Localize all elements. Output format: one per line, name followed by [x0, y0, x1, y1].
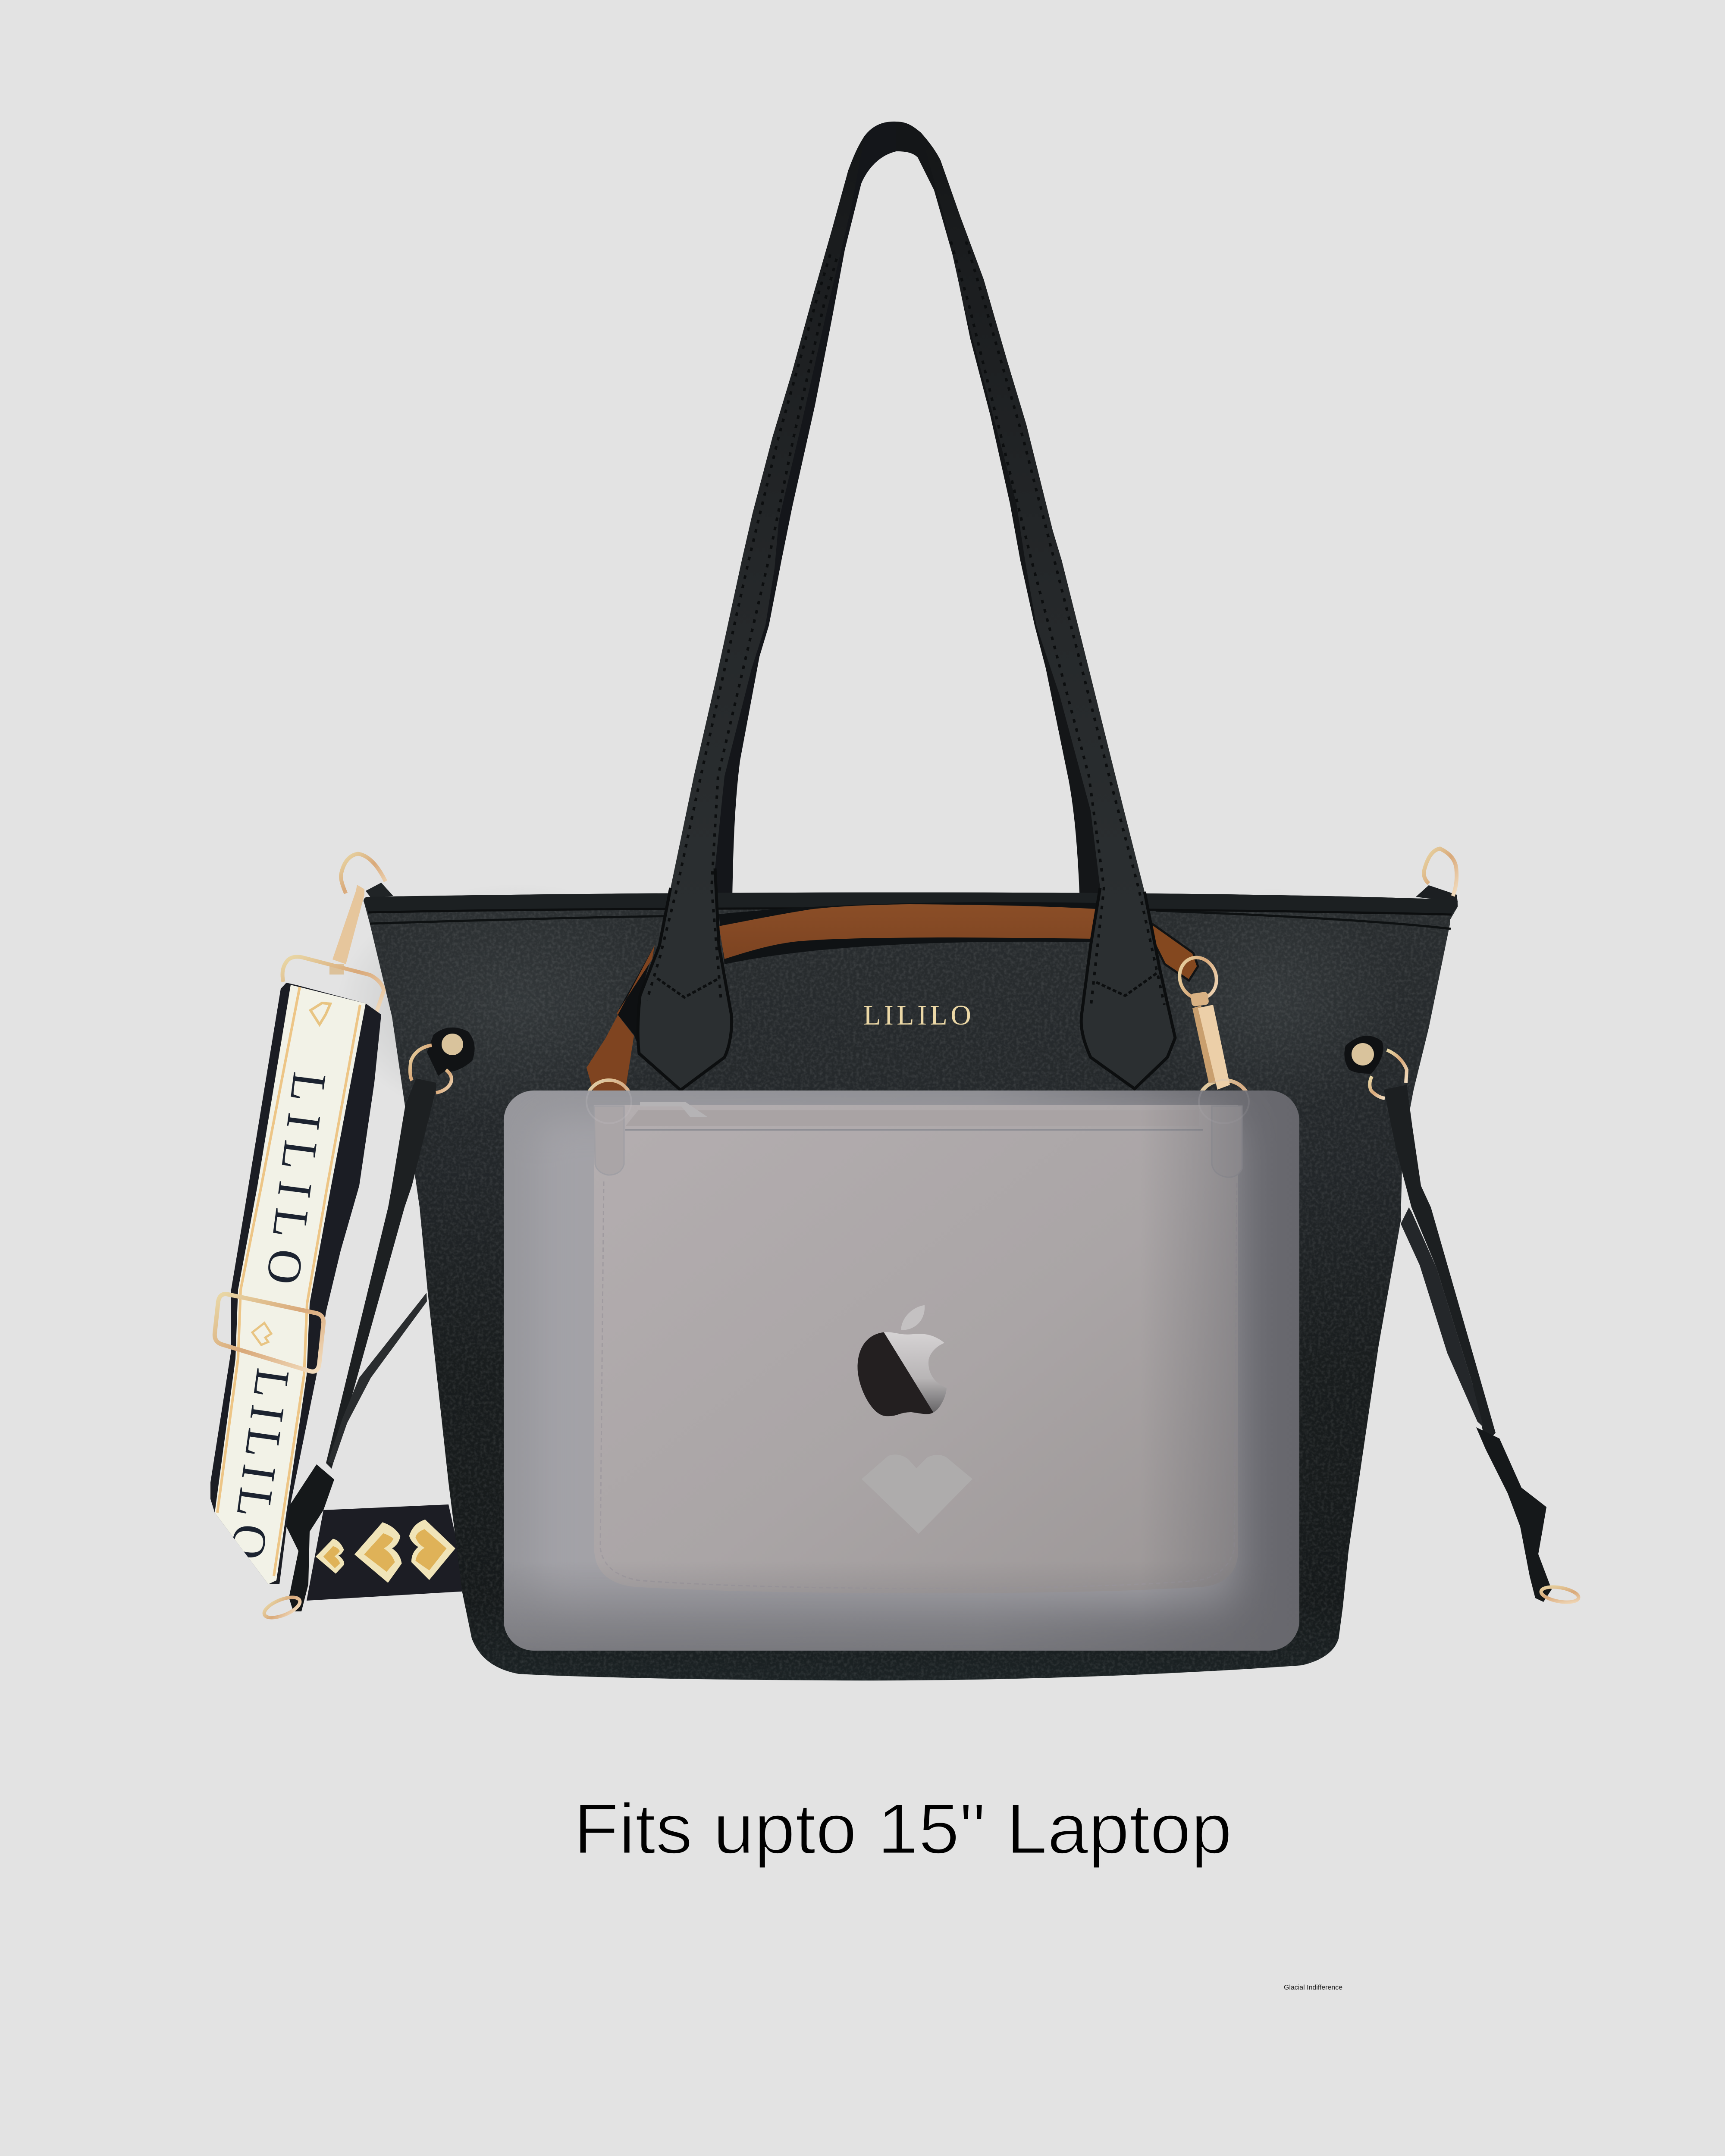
apple leaf — [901, 1305, 925, 1330]
icon: small side ring — [436, 1070, 452, 1093]
top rim band — [364, 893, 1458, 914]
strap loop — [282, 957, 384, 1015]
icon: ring right — [1387, 1050, 1407, 1083]
lower clasp ring — [1199, 1080, 1249, 1123]
icon: ring bottom left — [261, 1593, 303, 1622]
guitar strap with logo — [210, 983, 381, 1584]
rim edge line — [368, 909, 1452, 915]
left rivet patch — [410, 1028, 475, 1093]
icon: mirrored large gold heart on strap — [409, 1520, 455, 1580]
brown interior left strap and knot — [586, 945, 655, 1091]
right handle front strap and tab — [921, 132, 1175, 1089]
icon: apple logo — [851, 1305, 947, 1421]
small font credit: Glacial Indifference — [1284, 1984, 1342, 1991]
right handle inner stitching — [951, 241, 1104, 1005]
left handle front strap and tab — [638, 136, 865, 1090]
brand logo on bag: LILILO — [863, 1000, 971, 1031]
icon: small gold heart on strap — [316, 1539, 344, 1574]
cream centre band — [215, 985, 366, 1584]
icon: ring bottom right — [1540, 1585, 1580, 1604]
dark gap left of tab — [617, 945, 655, 1048]
logo on strap lower: LILILO — [220, 1365, 300, 1563]
icon: outline heart on strap — [310, 1003, 330, 1025]
left handle inner stitching — [712, 259, 837, 1000]
bag opening shadow — [719, 902, 1096, 964]
infographic canvas: tote bag with laptop overlay — [210, 122, 1580, 1990]
laptop right shade — [504, 1091, 1299, 1651]
icon: large gold heart on strap — [354, 1522, 402, 1583]
left pocket tab — [594, 1106, 624, 1175]
brown interior stripe centre — [719, 904, 1096, 959]
icon: rivet — [442, 1034, 463, 1055]
icon: rivet right — [1352, 1043, 1374, 1065]
icon: ring above laptop left — [586, 1080, 631, 1123]
yellow line left — [217, 987, 300, 1513]
caption: Fits upto 15" Laptop — [574, 1789, 1232, 1868]
leather sheen — [336, 884, 699, 1125]
icon: heart logo seen through laptop — [862, 1454, 972, 1534]
right pocket tab — [1212, 1106, 1242, 1177]
laptop soft inner glow — [535, 1117, 1242, 1613]
icon: clasp body right — [1198, 1005, 1230, 1090]
left tab stitching — [657, 978, 719, 997]
clasp spring — [1192, 1006, 1220, 1083]
right handle outer stitching — [966, 241, 1164, 1005]
yellow line right — [274, 1005, 360, 1576]
brown interior right piece — [1147, 920, 1198, 981]
clasp cross bar — [329, 964, 344, 975]
upper strap — [1384, 1085, 1496, 1444]
pocket stitching — [600, 1181, 1237, 1589]
gold slider buckle — [215, 1294, 323, 1372]
icon: outline heart on buckle — [252, 1323, 271, 1345]
leather grain texture — [362, 888, 1462, 1686]
zipper seam — [625, 1129, 1203, 1131]
left tab outline — [638, 868, 732, 1090]
right gold clasp near handle — [586, 953, 1249, 1123]
laptop bottom shade — [504, 1091, 1299, 1651]
icon: side ring — [410, 1045, 432, 1081]
lower connector right — [1476, 1427, 1552, 1602]
ghost ring left — [586, 1080, 631, 1123]
leather sheen right — [1143, 888, 1402, 1112]
icon: clasp body — [332, 885, 364, 964]
hearts drawn in zoom coordinates — [316, 1520, 455, 1583]
left side tie straps — [261, 1078, 436, 1622]
left ring leather loop — [366, 883, 393, 898]
top right ring — [1424, 849, 1457, 896]
right handle back strip — [896, 122, 1145, 901]
zipper band — [625, 1110, 1199, 1126]
second tie strap — [1401, 1207, 1484, 1427]
left handle outer stitching — [647, 254, 830, 1000]
right tab stitching — [1096, 972, 1158, 996]
icon: small ring right — [1370, 1076, 1385, 1098]
thin branch strap — [328, 1293, 427, 1464]
right ring leather loop — [1416, 885, 1458, 902]
back strap: black webbing with gold hearts — [307, 1504, 468, 1601]
rim lower seam — [370, 911, 1451, 929]
right rivet patch and tie straps — [1344, 1036, 1580, 1604]
logo on strap upper: LILILO — [256, 1069, 336, 1288]
right tab outline — [1081, 888, 1175, 1089]
bag body — [336, 883, 1462, 1686]
top left ring and clasp — [282, 854, 386, 1015]
ghost ring right — [1199, 1080, 1249, 1123]
lower connector — [282, 1464, 334, 1611]
left handle back strip — [671, 122, 896, 901]
clasp cap — [1190, 991, 1209, 1007]
apple dark half — [851, 1328, 936, 1421]
zipper pull — [640, 1102, 707, 1117]
laptop translucent overlay — [504, 1080, 1299, 1651]
bag pocket seen through laptop — [594, 1105, 1238, 1593]
